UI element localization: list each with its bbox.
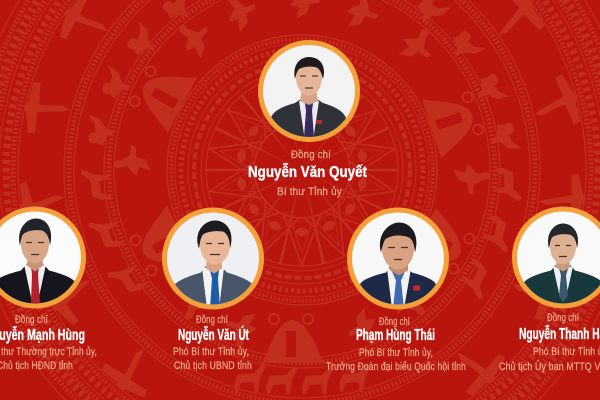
text: Nguyễn Thanh Hải: Đồng chí [547,312,579,324]
text: Phạm Hùng Thái: Đồng chí [379,316,410,328]
text: Phạm Hùng Thái: Phạm Hùng Thái [356,327,435,344]
text: Phạm Hùng Thái [326,316,466,373]
text: Nguyễn Mạnh Hùng: Đồng chí [15,314,48,326]
portrait: Nguyễn Thanh Hải [512,206,600,308]
text: Phạm Hùng Thái: Phó Bí thư Tỉnh ủy, [359,347,433,359]
birds and deer ring [80,0,524,394]
portrait: Nguyễn Văn Quyết [258,40,360,142]
text: Nguyễn Văn Út: Chủ tịch UBND tỉnh [174,360,252,372]
text: Nguyễn Văn Út: Đồng chí [196,314,228,326]
text: Nguyễn Thanh Hải [499,312,600,373]
text: Nguyễn Mạnh Hùng [0,314,97,372]
portrait: Phạm Hùng Thái [347,208,449,310]
inner figures ring [114,0,490,363]
portrait: Nguyễn Văn Út [162,208,264,310]
portrait: Nguyễn Mạnh Hùng [0,206,86,308]
text: Phạm Hùng Thái: Trưởng Đoàn đại biểu Quốc hội tỉnh [326,361,466,373]
text: Nguyễn Văn Quyết: Đồng chí [291,149,331,161]
text: Nguyễn Văn Quyết [248,149,368,198]
text: Nguyễn Văn Quyết: Bí thư Tỉnh ủy [277,186,342,198]
central star [205,75,399,265]
text: Nguyễn Văn Út [173,314,252,372]
text: Nguyễn Văn Quyết: Nguyễn Văn Quyết [248,162,368,181]
text: Nguyễn Văn Út: Nguyễn Văn Út [178,325,249,344]
text: Nguyễn Văn Út: Phó Bí thư Tỉnh ủy, [173,346,249,358]
